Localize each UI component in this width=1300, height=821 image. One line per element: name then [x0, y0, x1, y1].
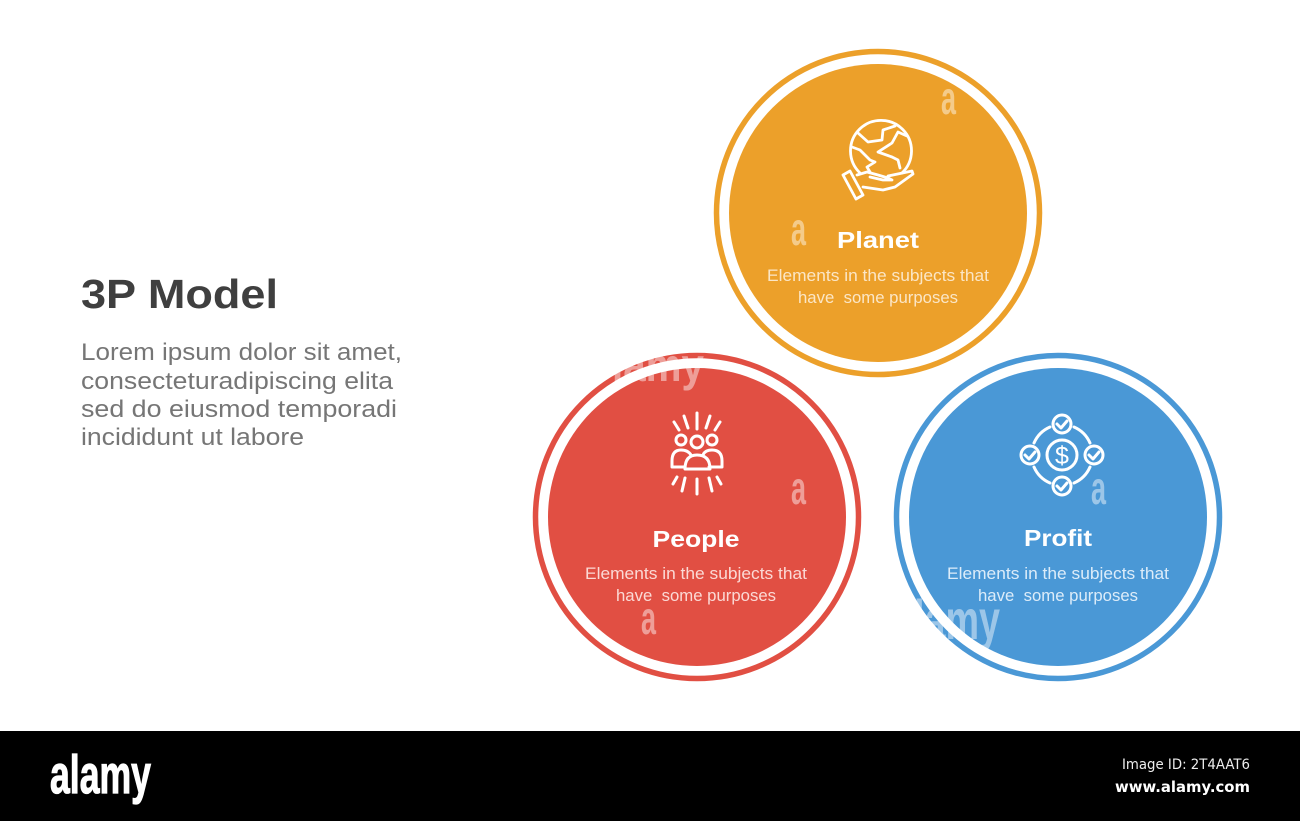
icon: dollar with check marks	[1021, 415, 1103, 495]
heading: profit: Profit	[1024, 525, 1092, 551]
description: planet: Elements in the subjects that	[767, 266, 989, 285]
description: people	[585, 564, 807, 605]
intro text block: incididunt ut labore	[81, 424, 304, 451]
panel: people	[536, 356, 858, 678]
planet circle	[716, 52, 1040, 374]
description: profit: Elements in the subjects that	[947, 564, 1169, 583]
dollar sign: $	[1055, 442, 1069, 470]
intro text block: sed do eiusmod temporadi	[81, 396, 397, 423]
footer bar	[0, 731, 1300, 821]
heading: people: People	[652, 526, 740, 552]
description: planet	[767, 266, 989, 307]
watermark fragments: a	[1091, 462, 1106, 514]
title: 3P Model	[81, 271, 278, 317]
intro text block	[81, 339, 402, 451]
profit circle	[896, 356, 1220, 678]
intro text block: consecteturadipiscing elita	[81, 368, 394, 395]
watermark fragments: a	[641, 592, 656, 644]
watermark fragments: lamy	[612, 339, 704, 391]
website: www.alamy.com	[1115, 778, 1250, 796]
alamy logo: alamy	[50, 745, 151, 805]
image id: Image ID: 2T4AAT6	[1122, 757, 1250, 773]
panel: planet	[716, 52, 1040, 374]
icon: group of people	[672, 413, 722, 494]
description: profit: have some purposes	[978, 586, 1138, 605]
description: people: have some purposes	[616, 586, 776, 605]
watermark fragments: a	[941, 72, 956, 124]
description: planet: have some purposes	[798, 288, 958, 307]
panel: profit	[896, 356, 1220, 678]
intro text block: Lorem ipsum dolor sit amet,	[81, 339, 402, 366]
watermark fragments	[612, 72, 1106, 651]
people circle	[536, 356, 858, 678]
watermark fragments: a	[791, 203, 806, 255]
icon: hand holding globe	[843, 120, 913, 199]
watermark fragments: a	[791, 462, 806, 514]
description: people: Elements in the subjects that	[585, 564, 807, 583]
watermark fragments: lamy	[914, 588, 1000, 651]
description: profit	[947, 564, 1169, 605]
heading: planet: Planet	[837, 227, 919, 253]
